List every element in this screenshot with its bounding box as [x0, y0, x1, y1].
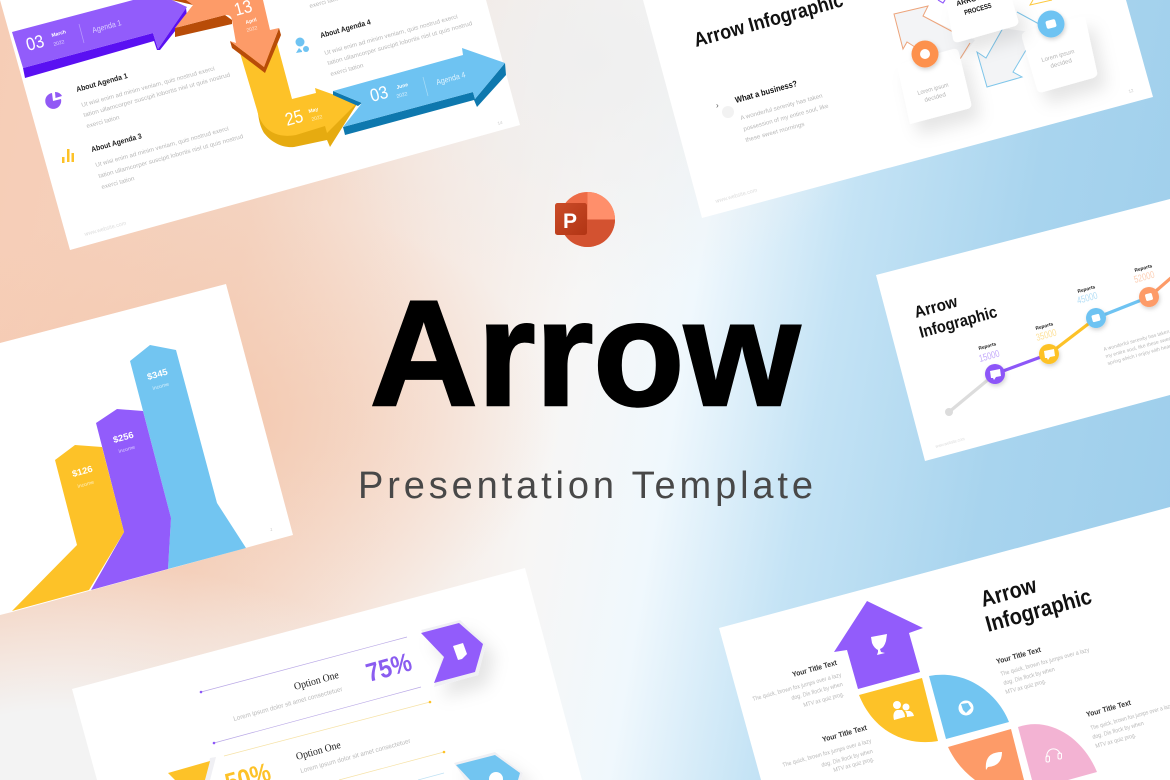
text block: title left two: [782, 723, 875, 774]
panel: arrow process slide top right: [643, 0, 1153, 218]
text block: title left one: Your Title Text: [791, 658, 838, 679]
text block: title left two: The quick, brown fox jumps over a lazy: [782, 739, 872, 769]
arrow: purple 256: [91, 409, 171, 590]
text block: about agenda 3: tation ullamcorper suscipit lobortis nisl ut quis nostrud: [98, 134, 244, 180]
text block: about agenda 4: tation ullamcorper suscipit lobortis nisl ut quis nostrud: [327, 21, 473, 67]
arrow: orange april: April: [245, 17, 258, 26]
segment: pink headphones: [1018, 724, 1097, 780]
icon: person pin: [296, 38, 309, 53]
node: 35000: 35000: [1035, 328, 1058, 344]
arrow: blue 345: $345: [146, 367, 169, 382]
stat: 75 percent: 75%: [363, 647, 415, 688]
card: blue: decided: [1050, 58, 1073, 70]
heading: Arrow: [978, 572, 1040, 612]
text block: what a business: these sweet mornings: [745, 122, 805, 144]
line chart: [945, 263, 1170, 416]
page number: 14: [497, 120, 504, 126]
page number: 12: [1128, 88, 1135, 94]
text block: about agenda 1: About Agenda 1: [75, 71, 129, 94]
card: arrow process: [946, 0, 1018, 42]
page number: 1: [270, 527, 273, 532]
text block: title left two: MTV ax quiz prog.: [833, 757, 875, 774]
text block: about agenda 3: About Agenda 3: [90, 131, 143, 154]
panel: quarter arrow slide bottom right: [719, 507, 1170, 780]
title: Arrow: [370, 269, 800, 437]
panel: options slide bottom left: [72, 568, 582, 780]
text block: about agenda 1: Ut wisi enim ad minim veniam, quis nostrud exerci: [81, 66, 216, 109]
arrow outline: blue: [977, 28, 1030, 87]
text block: option one second: Option One: [295, 740, 342, 763]
arrow: yellow may: 2022: [311, 114, 323, 123]
text block: title right one: dog. Dis flock by when: [1003, 667, 1056, 687]
text block: option one: Option One: [293, 670, 340, 693]
text block: title left two: dog. Dis flock by when: [821, 749, 874, 769]
arrow: yellow may: [240, 43, 357, 147]
arrow: yellow 126: income: [77, 480, 95, 490]
node: 35000: Reports: [1035, 321, 1054, 332]
panel: income chart slide left: [0, 284, 293, 615]
arrow: yellow may: May: [308, 106, 319, 115]
card: orange: decided: [924, 92, 947, 104]
heading: Arrow: [912, 293, 960, 322]
node: 35000: [1035, 321, 1059, 364]
icon: powerpoint logo: P: [563, 210, 577, 233]
node: 45000: [1076, 284, 1106, 328]
text block: title left one: The quick, brown fox jumps over a lazy: [752, 673, 842, 703]
arrow: blue agenda 4: June: [396, 82, 409, 91]
node: 52000: 52000: [1133, 270, 1156, 286]
icon: orange circle: [912, 40, 938, 68]
arrow: yellow 126: [12, 445, 124, 611]
arrow outline: orange: [894, 6, 975, 60]
node: 15000: Reports: [978, 341, 997, 352]
connector: blue line: [1017, 12, 1039, 24]
text block: about agenda 3: [90, 126, 244, 191]
text block: title left two: Your Title Text: [821, 723, 868, 744]
segment: blue globe: [929, 675, 1009, 739]
arrow: purple agenda 1: 2022: [53, 39, 65, 48]
heading: Infographic: [983, 584, 1094, 637]
footer: website: www.website.com: [935, 436, 965, 449]
text block: about agenda 4: [309, 0, 473, 78]
card: blue: [1022, 17, 1097, 92]
arrow: orange april: 2022: [246, 25, 258, 34]
icon: chevron: ›: [716, 101, 719, 110]
hexagon: yellow icon: [168, 757, 216, 780]
arrow: blue agenda 4: 2022: [396, 91, 408, 100]
card: orange: [897, 49, 971, 124]
text block: [1103, 322, 1170, 367]
text block: option one: Lorem ipsum dolor sit amet consectetuer: [233, 686, 344, 723]
text block: option one second: Lorem ipsum dolor sit amet consectetuer: [300, 738, 412, 775]
text block: what a business: possession of my entire soul, like: [743, 103, 830, 133]
text block: title right two: dog. Dis flock by when: [1092, 721, 1145, 741]
text block: title right two: MTV ax quiz prog.: [1095, 733, 1137, 750]
icon: powerpoint logo: [555, 192, 615, 247]
icon: bar chart: [62, 149, 74, 163]
arrow: purple agenda 1: Agenda 1: [91, 18, 123, 35]
option lines: [200, 637, 445, 780]
arrow: purple 256: income: [118, 445, 136, 455]
text block: title left one: [752, 658, 845, 709]
text block: about agenda 3: exerci tation: [101, 176, 135, 191]
icon: chevron: [716, 101, 734, 118]
text block: title right two: Your Title Text: [1085, 698, 1132, 719]
arrow: purple agenda 1: March: [51, 29, 67, 39]
text block: title right one: [995, 645, 1090, 696]
node: 52000: [1133, 263, 1159, 307]
text block: about agenda 4: exerci tation: [330, 63, 364, 78]
text block: what a business: [734, 78, 830, 144]
arrow: purple agenda 1: 03: [24, 31, 46, 55]
arrow: yellow may: 25: [283, 106, 305, 130]
arrow: purple 256: $256: [112, 430, 135, 445]
node: 15000: 15000: [978, 349, 1001, 365]
text block: what a business: A wonderful serenity has taken: [740, 93, 823, 122]
arrow outline: yellow: [1030, 0, 1052, 5]
text block: title left one: dog. Dis flock by when: [791, 682, 844, 702]
text block: about agenda 1: exerci tation: [86, 115, 120, 130]
subtitle: Presentation Template: [358, 465, 813, 507]
text block: about agenda 4: About Agenda 4: [319, 17, 372, 40]
text block: what a business: What a business?: [734, 78, 798, 105]
arrow outline: purple: [938, 0, 945, 3]
card: arrow process: PROCESS: [964, 3, 993, 17]
text block: about agenda 1: tation ullamcorper suscipit lobortis nisl ut quis nostrud: [83, 73, 231, 119]
card: blue: Lorem ipsum: [1041, 49, 1075, 64]
node: 52000: Reports: [1134, 263, 1153, 274]
text block: about agenda 1: [75, 66, 231, 130]
hexagon: purple icon: [421, 620, 486, 687]
text block: about agenda 3: Ut wisi enim ad minim veniam, quis nostrud exerci: [95, 126, 230, 169]
text block: title right one: MTV ax quiz prog.: [1005, 679, 1047, 696]
arrow: purple agenda 1: [12, 0, 187, 78]
icon: pie chart: [45, 92, 62, 109]
arrow: purple trophy: [834, 601, 923, 689]
segment: orange leaf: [948, 729, 1024, 780]
arrow: blue agenda 4: Agenda 4: [435, 70, 467, 87]
text block: title right two: [1085, 698, 1170, 750]
text block: title right one: Your Title Text: [995, 645, 1042, 666]
text block: about agenda 4: Ut wisi enim ad minim veniam, quis nostrud exerci: [324, 14, 459, 57]
segment: yellow people: [859, 678, 938, 742]
arrow: blue 345: [130, 345, 246, 569]
card: orange: Lorem ipsum: [917, 83, 949, 97]
panel: timeline slide right: [876, 199, 1170, 461]
hexagon: blue icon: [454, 752, 523, 780]
arrow: yellow 126: $126: [71, 464, 94, 479]
footer: website: www.website.com: [83, 221, 127, 238]
node: 45000: Reports: [1077, 284, 1096, 295]
node: 15000: [978, 341, 1005, 384]
node: 45000: 45000: [1076, 291, 1099, 307]
arrow: blue 345: income: [152, 382, 170, 392]
panel: agenda slide top left: [0, 0, 520, 250]
text block: title right one: The quick, brown fox jumps over a lazy: [1000, 648, 1090, 678]
text block: title left one: MTV ax quiz prog.: [803, 692, 845, 709]
arrow: blue agenda 4: [333, 48, 506, 135]
arrow: orange april: [172, 0, 281, 73]
arrow: blue agenda 4: 03: [368, 82, 390, 106]
footer: website: www.website.com: [714, 188, 758, 205]
icon: blue circle: [1038, 10, 1064, 38]
heading: Infographic: [917, 303, 999, 342]
